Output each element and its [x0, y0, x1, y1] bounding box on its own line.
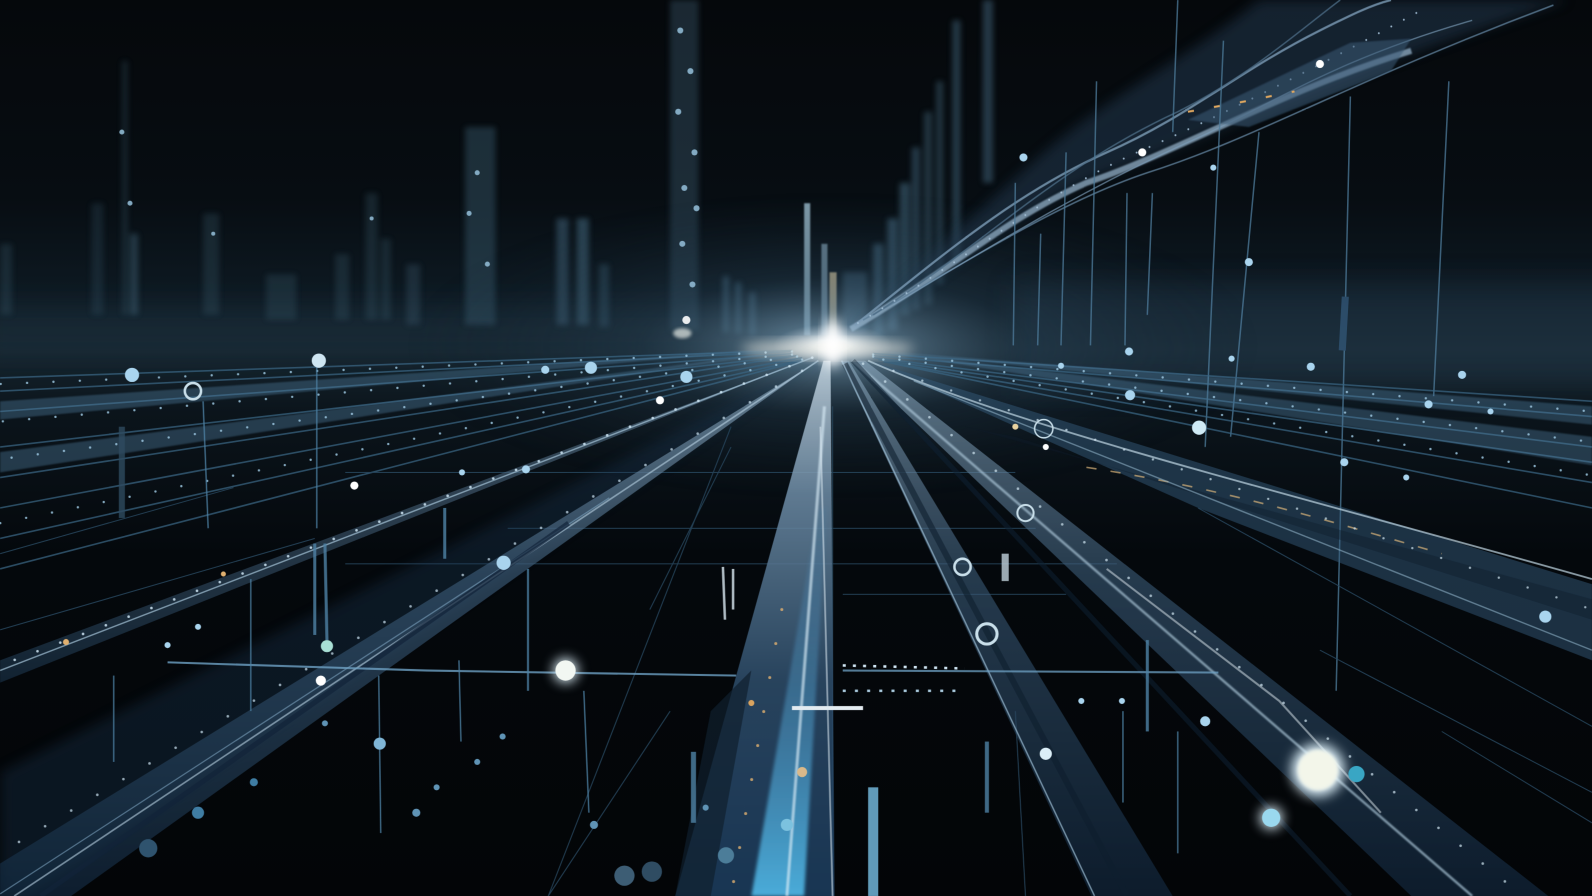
ring nodes [185, 383, 1053, 644]
vanishing point flare [673, 319, 914, 368]
left horizon haze [0, 305, 812, 356]
stream: lower left [0, 361, 818, 896]
right horizon haze [1015, 284, 1592, 386]
stream: centre [675, 361, 863, 896]
tower particle columns [119, 27, 700, 324]
stream: lower right [841, 361, 1173, 896]
stream: far left [0, 358, 812, 683]
distant data towers [0, 0, 993, 335]
perspective cross grid [0, 406, 1592, 896]
floor dot trails [0, 351, 1592, 523]
central slim towers [804, 203, 837, 339]
stream: right [851, 361, 1548, 896]
vertical droplet lines [114, 366, 1178, 896]
far floor fan [0, 350, 1592, 569]
upper right flowing ribbon [848, 0, 1569, 330]
horizontal light line [168, 662, 1218, 691]
stream: far right [868, 361, 1592, 660]
hanging data lines right [1013, 0, 1449, 691]
horizon glow [305, 193, 1361, 498]
